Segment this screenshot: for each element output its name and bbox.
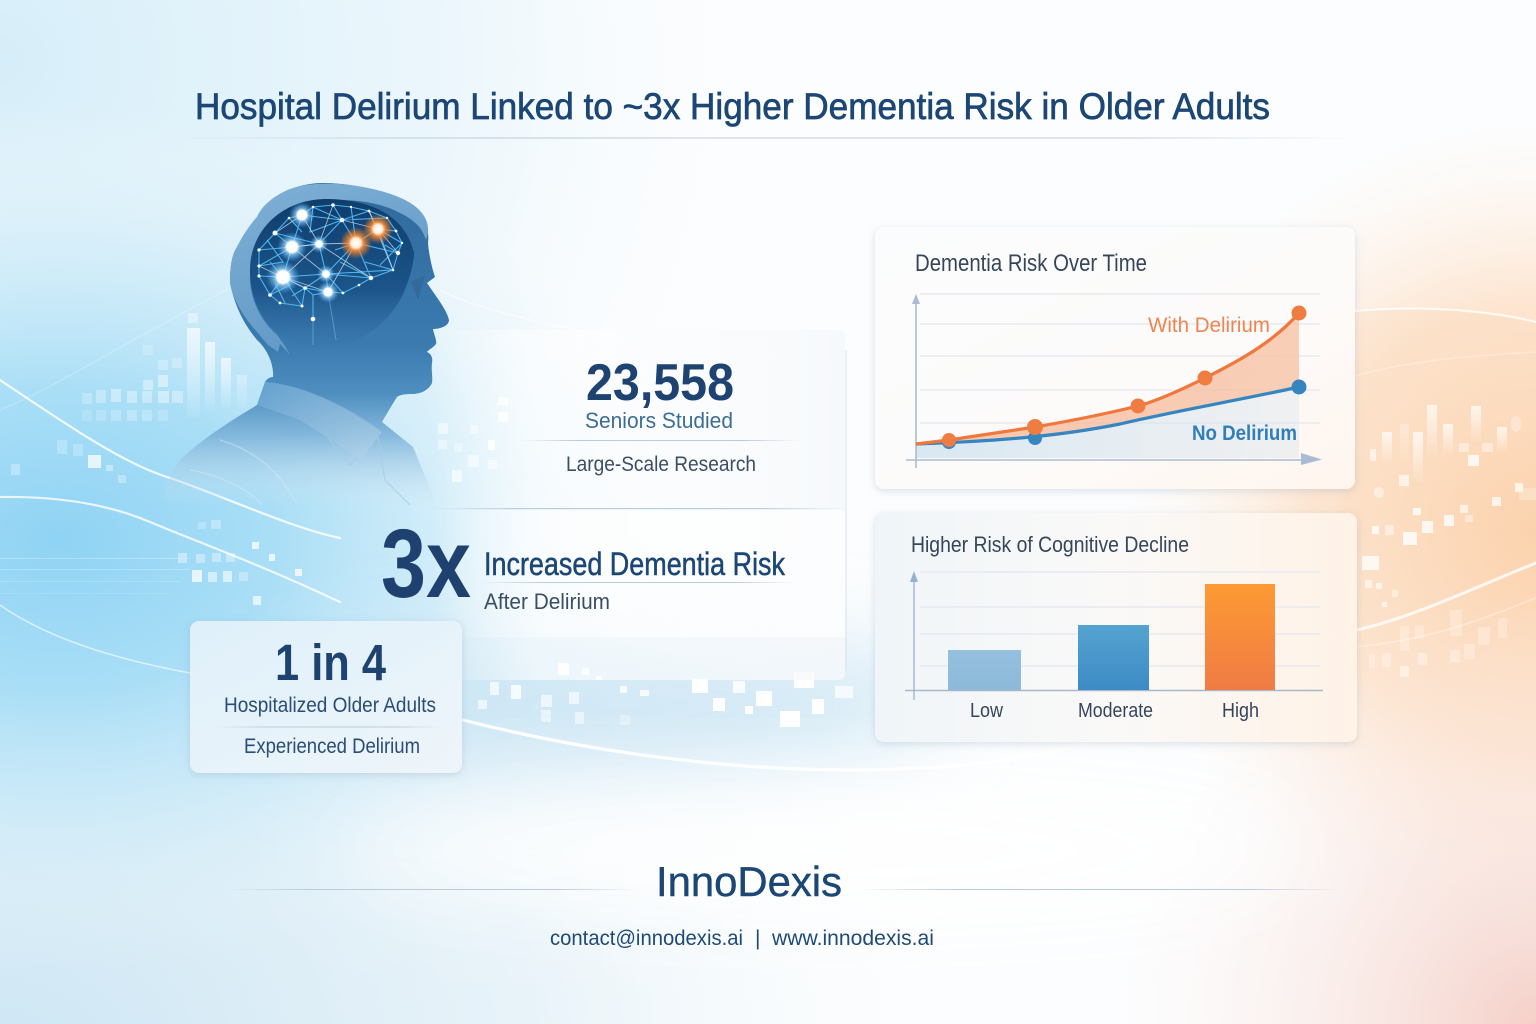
background waves	[0, 288, 1536, 770]
panel: cognitive decline bar chart	[875, 513, 1357, 742]
footer contact	[550, 927, 934, 950]
axes	[906, 294, 1322, 468]
label: no delirium: No Delirium	[1192, 422, 1297, 445]
footer brand: InnoDexis	[656, 858, 842, 905]
bar: low	[948, 650, 1021, 690]
label: with delirium: With Delirium	[1148, 314, 1270, 337]
stat: seniors studied	[520, 354, 800, 476]
brain background	[250, 199, 414, 348]
chart title: Dementia Risk Over Time	[915, 250, 1147, 277]
card: 1 in 4: Hospitalized Older Adults	[224, 694, 436, 717]
stat: 3x dementia risk: 3x	[381, 509, 471, 618]
bar: moderate	[1078, 625, 1149, 690]
panel: study statistics	[381, 330, 847, 680]
stat: seniors studied: Seniors Studied	[585, 408, 733, 433]
gridlines	[920, 294, 1320, 423]
background data bars and pixels	[0, 313, 1536, 727]
line: with delirium	[916, 306, 1306, 447]
head silhouette	[163, 183, 449, 505]
hair	[230, 184, 428, 355]
stat: 3x dementia risk: After Delirium	[484, 589, 610, 614]
bar labels	[970, 700, 1259, 722]
stat: seniors studied: Large-Scale Research	[566, 453, 756, 476]
line: no delirium	[916, 380, 1306, 449]
bar: high	[1205, 584, 1275, 690]
title: Hospital Delirium Linked to ~3x Higher Dementia Risk in Older Adults	[195, 86, 1270, 127]
card: 1 in 4: Experienced Delirium	[244, 735, 420, 758]
footer contact: www.innodexis.ai	[771, 927, 934, 950]
bar labels: Low	[970, 700, 1003, 722]
bar labels: High	[1222, 700, 1259, 722]
center pixels	[438, 397, 853, 727]
card: 1 in 4	[190, 621, 462, 773]
bar labels: Moderate	[1078, 700, 1153, 722]
face shadow	[411, 276, 425, 300]
brain network	[257, 202, 403, 345]
shirt collar	[257, 382, 382, 460]
footer contact: contact@innodexis.ai	[550, 927, 743, 950]
gridlines	[920, 572, 1320, 666]
shaded areas	[916, 387, 1299, 458]
right pixels	[1362, 405, 1536, 677]
panel: dementia risk line chart	[875, 227, 1355, 489]
stat: 3x dementia risk: Increased Dementia Risk	[484, 546, 786, 582]
chart title: Higher Risk of Cognitive Decline	[911, 532, 1189, 557]
stat: seniors studied: 23,558	[586, 354, 734, 412]
card: 1 in 4: 1 in 4	[275, 634, 387, 691]
axes	[905, 571, 1323, 700]
stat: 3x dementia risk	[381, 509, 845, 637]
footer contact: |	[755, 927, 760, 950]
body and face	[163, 183, 449, 505]
